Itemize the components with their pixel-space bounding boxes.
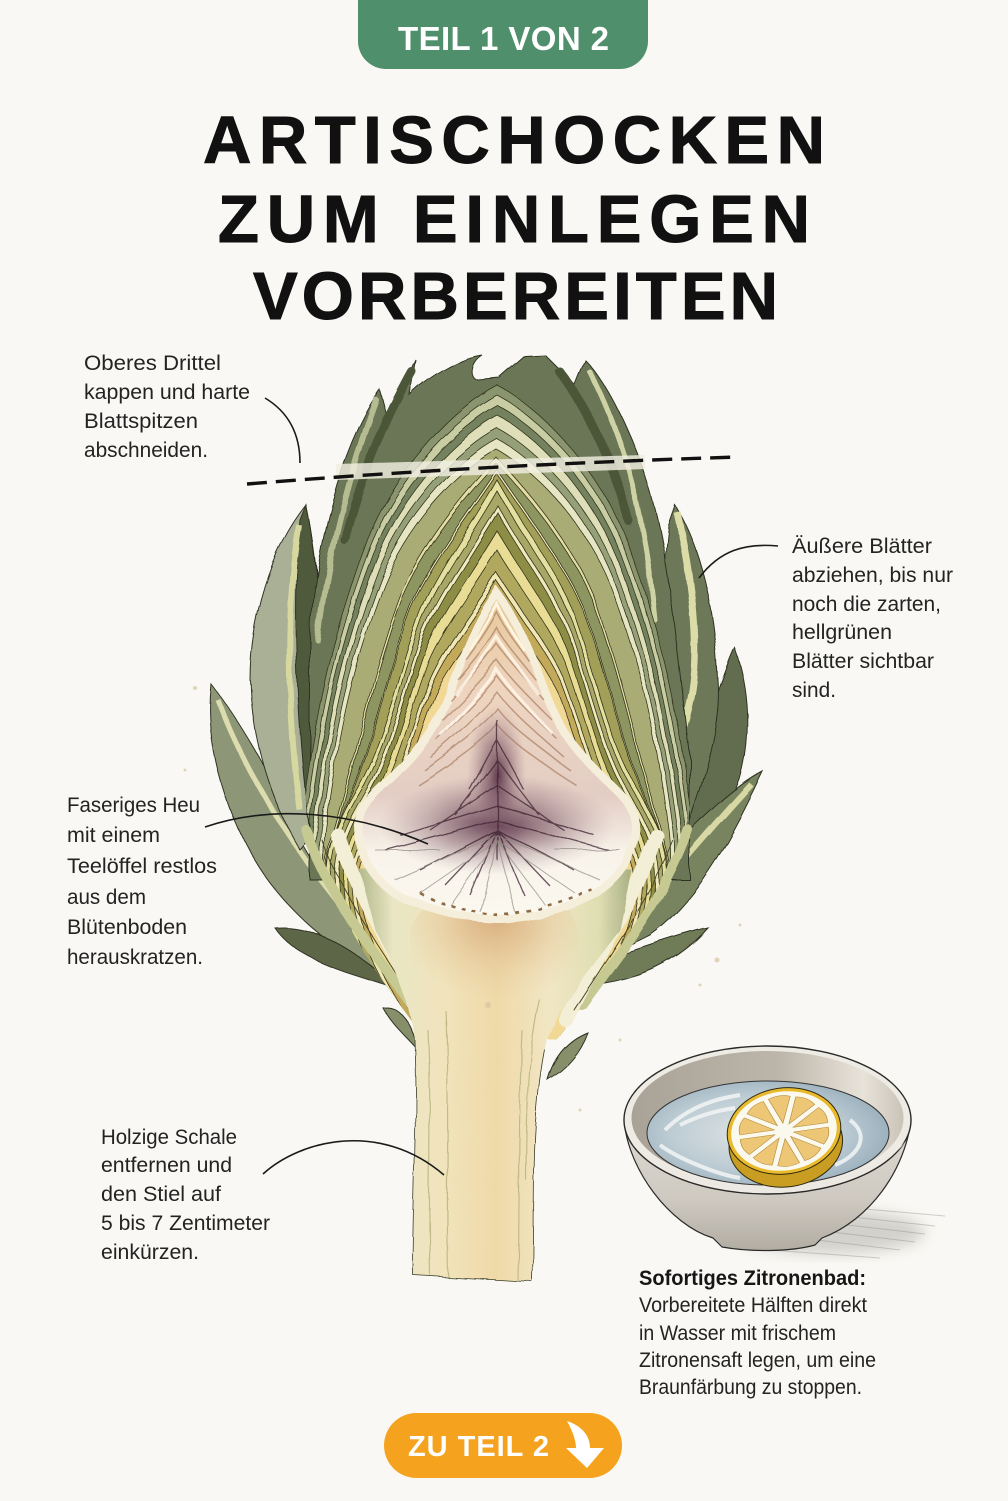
text: outer leaves: noch die zarten,	[792, 593, 941, 616]
cut guide: band and dashed line	[247, 455, 738, 484]
text: choke: Blütenboden	[67, 916, 187, 939]
text: stem: entfernen und	[101, 1154, 232, 1177]
badge: part 1 of 2: TEIL 1 VON 2	[398, 20, 609, 57]
text: choke: Faseriges Heu	[67, 794, 200, 817]
crown leaf stripes	[318, 372, 655, 640]
title: ZUM EINLEGEN	[218, 182, 810, 257]
stem fibres	[428, 1000, 540, 1280]
text: stem	[101, 1126, 270, 1264]
callout lines	[205, 398, 778, 1175]
text: lemon bath: Zitronensaft legen, um eine	[639, 1349, 876, 1372]
bowl body	[624, 1120, 911, 1251]
text: outer leaves: Blätter sichtbar	[792, 650, 934, 673]
bowl inside	[632, 1051, 904, 1185]
badge: part 1 of 2	[358, 0, 648, 69]
text: outer leaves: abziehen, bis nur	[792, 564, 953, 587]
button: to part 2	[384, 1413, 622, 1478]
text: lemon bath: Vorbereitete Hälften direkt	[639, 1294, 867, 1317]
text: stem: den Stiel auf	[101, 1183, 221, 1206]
text: outer leaves: sind.	[792, 679, 836, 702]
lemon slice	[722, 1080, 848, 1194]
title: VORBEREITEN	[253, 259, 778, 334]
bowl shadow	[735, 1206, 945, 1258]
main leaf body	[310, 355, 690, 880]
illustration: bowl with lemon slice	[624, 1046, 945, 1258]
text: top cut: kappen und harte	[84, 381, 250, 404]
illustration: artichoke cross-section	[211, 355, 763, 1282]
button: to part 2: ZU TEIL 2	[408, 1431, 549, 1463]
title	[203, 103, 825, 334]
text: choke: herauskratzen.	[67, 946, 203, 969]
text: lemon bath: Braunfärbung zu stoppen.	[639, 1376, 862, 1399]
heart halo	[362, 600, 632, 915]
icon: curved down arrow	[566, 1421, 604, 1468]
text: stem: 5 bis 7 Zentimeter	[101, 1212, 270, 1235]
purple choke centre	[379, 775, 615, 875]
paint splatters	[184, 686, 742, 1112]
text: outer leaves: Äußere Blätter	[792, 535, 932, 558]
outer leaves left	[211, 505, 418, 1050]
text: stem: Holzige Schale	[101, 1126, 237, 1149]
heart with choke fibres	[362, 600, 632, 915]
text: lemon bath: in Wasser mit frischem	[639, 1322, 836, 1345]
base bands flowing to stem	[306, 830, 428, 1020]
text: outer leaves	[792, 535, 953, 702]
text: choke	[67, 794, 217, 969]
outer leaves right	[548, 505, 763, 1080]
receptacle and stem	[360, 870, 632, 1282]
text: lemon bath: Sofortiges Zitronenbad:	[639, 1267, 866, 1290]
front rim	[628, 1140, 907, 1193]
text: stem: einkürzen.	[101, 1241, 199, 1264]
text: outer leaves: hellgrünen	[792, 621, 892, 644]
text: choke: Teelöffel restlos	[67, 855, 217, 878]
text: top cut: Blattspitzen	[84, 410, 198, 433]
text: top cut	[84, 352, 250, 462]
water	[647, 1081, 889, 1185]
title: ARTISCHOCKEN	[203, 103, 825, 178]
text: top cut: abschneiden.	[84, 439, 208, 462]
inner chevrons	[418, 612, 576, 785]
text: top cut: Oberes Drittel	[84, 352, 221, 375]
text: lemon bath	[639, 1267, 876, 1399]
bowl rim	[624, 1046, 911, 1194]
text: choke: mit einem	[67, 824, 160, 847]
text: choke: aus dem	[67, 886, 146, 909]
nested leaf arches	[305, 384, 690, 1040]
